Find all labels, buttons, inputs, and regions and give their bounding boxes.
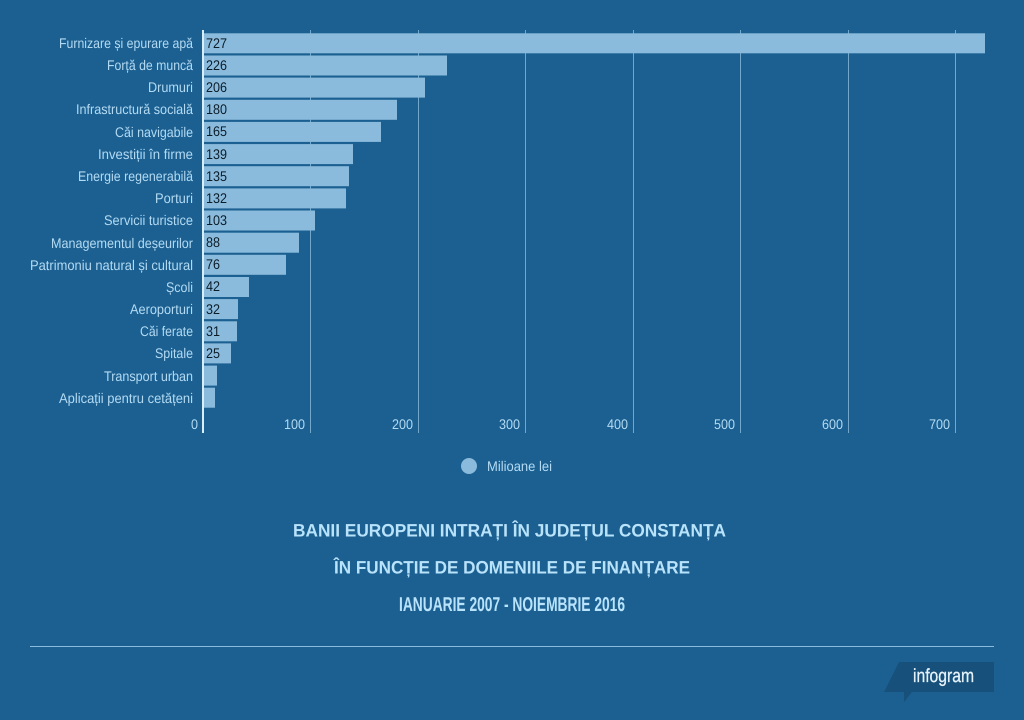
value labels: 25: [206, 345, 220, 361]
category labels: [30, 35, 193, 406]
value labels: 31: [206, 323, 220, 339]
value labels: 135: [206, 168, 227, 184]
value labels: 727: [206, 35, 227, 51]
category labels: Forță de muncă: [107, 57, 193, 73]
value labels: 165: [206, 123, 227, 139]
axis labels: 100: [284, 416, 305, 432]
axis labels: 700: [929, 416, 950, 432]
legend: Milioane lei: [487, 458, 552, 474]
axis labels: 600: [822, 416, 843, 432]
axis labels: 300: [499, 416, 520, 432]
category labels: Infrastructură socială: [76, 101, 193, 117]
value labels: 32: [206, 301, 220, 317]
category labels: Servicii turistice: [104, 212, 193, 228]
value labels: 103: [206, 212, 227, 228]
title: ÎN FUNCȚIE DE DOMENIILE DE FINANȚARE: [333, 556, 690, 578]
value labels: 42: [206, 278, 220, 294]
value labels: 139: [206, 146, 227, 162]
legend: [461, 458, 552, 474]
category labels: Căi navigabile: [115, 124, 193, 140]
axis line: [202, 30, 204, 433]
value labels: 206: [206, 79, 227, 95]
category labels: Furnizare și epurare apă: [59, 35, 193, 51]
category labels: Energie regenerabilă: [78, 168, 193, 184]
category labels: Investiții în firme: [98, 146, 193, 162]
infogram logo: [884, 662, 994, 702]
axis labels: 400: [607, 416, 628, 432]
category labels: Spitale: [155, 345, 193, 361]
axis labels: 200: [392, 416, 413, 432]
category labels: Managementul deșeurilor: [51, 235, 193, 251]
value labels: 88: [206, 234, 220, 250]
category labels: Porturi: [155, 190, 193, 206]
infogram logo: infogram: [913, 666, 974, 687]
value labels: 76: [206, 256, 220, 272]
axis labels: 0: [191, 416, 198, 432]
value labels: 132: [206, 190, 227, 206]
value labels: 226: [206, 57, 227, 73]
value labels: [206, 35, 227, 361]
bar chart: [30, 30, 985, 433]
title: IANUARIE 2007 - NOIEMBRIE 2016: [399, 594, 625, 616]
category labels: Transport urban: [104, 368, 193, 384]
title: [293, 520, 726, 616]
axis labels: [191, 416, 950, 432]
axis labels: 500: [714, 416, 735, 432]
title: BANII EUROPENI INTRAȚI ÎN JUDEȚUL CONSTANȚA: [293, 520, 726, 540]
category labels: Drumuri: [148, 79, 193, 95]
category labels: Aeroporturi: [130, 301, 193, 317]
value labels: 180: [206, 101, 227, 117]
category labels: Aplicații pentru cetățeni: [59, 390, 193, 406]
category labels: Școli: [166, 279, 193, 295]
category labels: Patrimoniu natural și cultural: [30, 257, 193, 273]
category labels: Căi ferate: [140, 323, 193, 339]
bars: [204, 33, 985, 408]
